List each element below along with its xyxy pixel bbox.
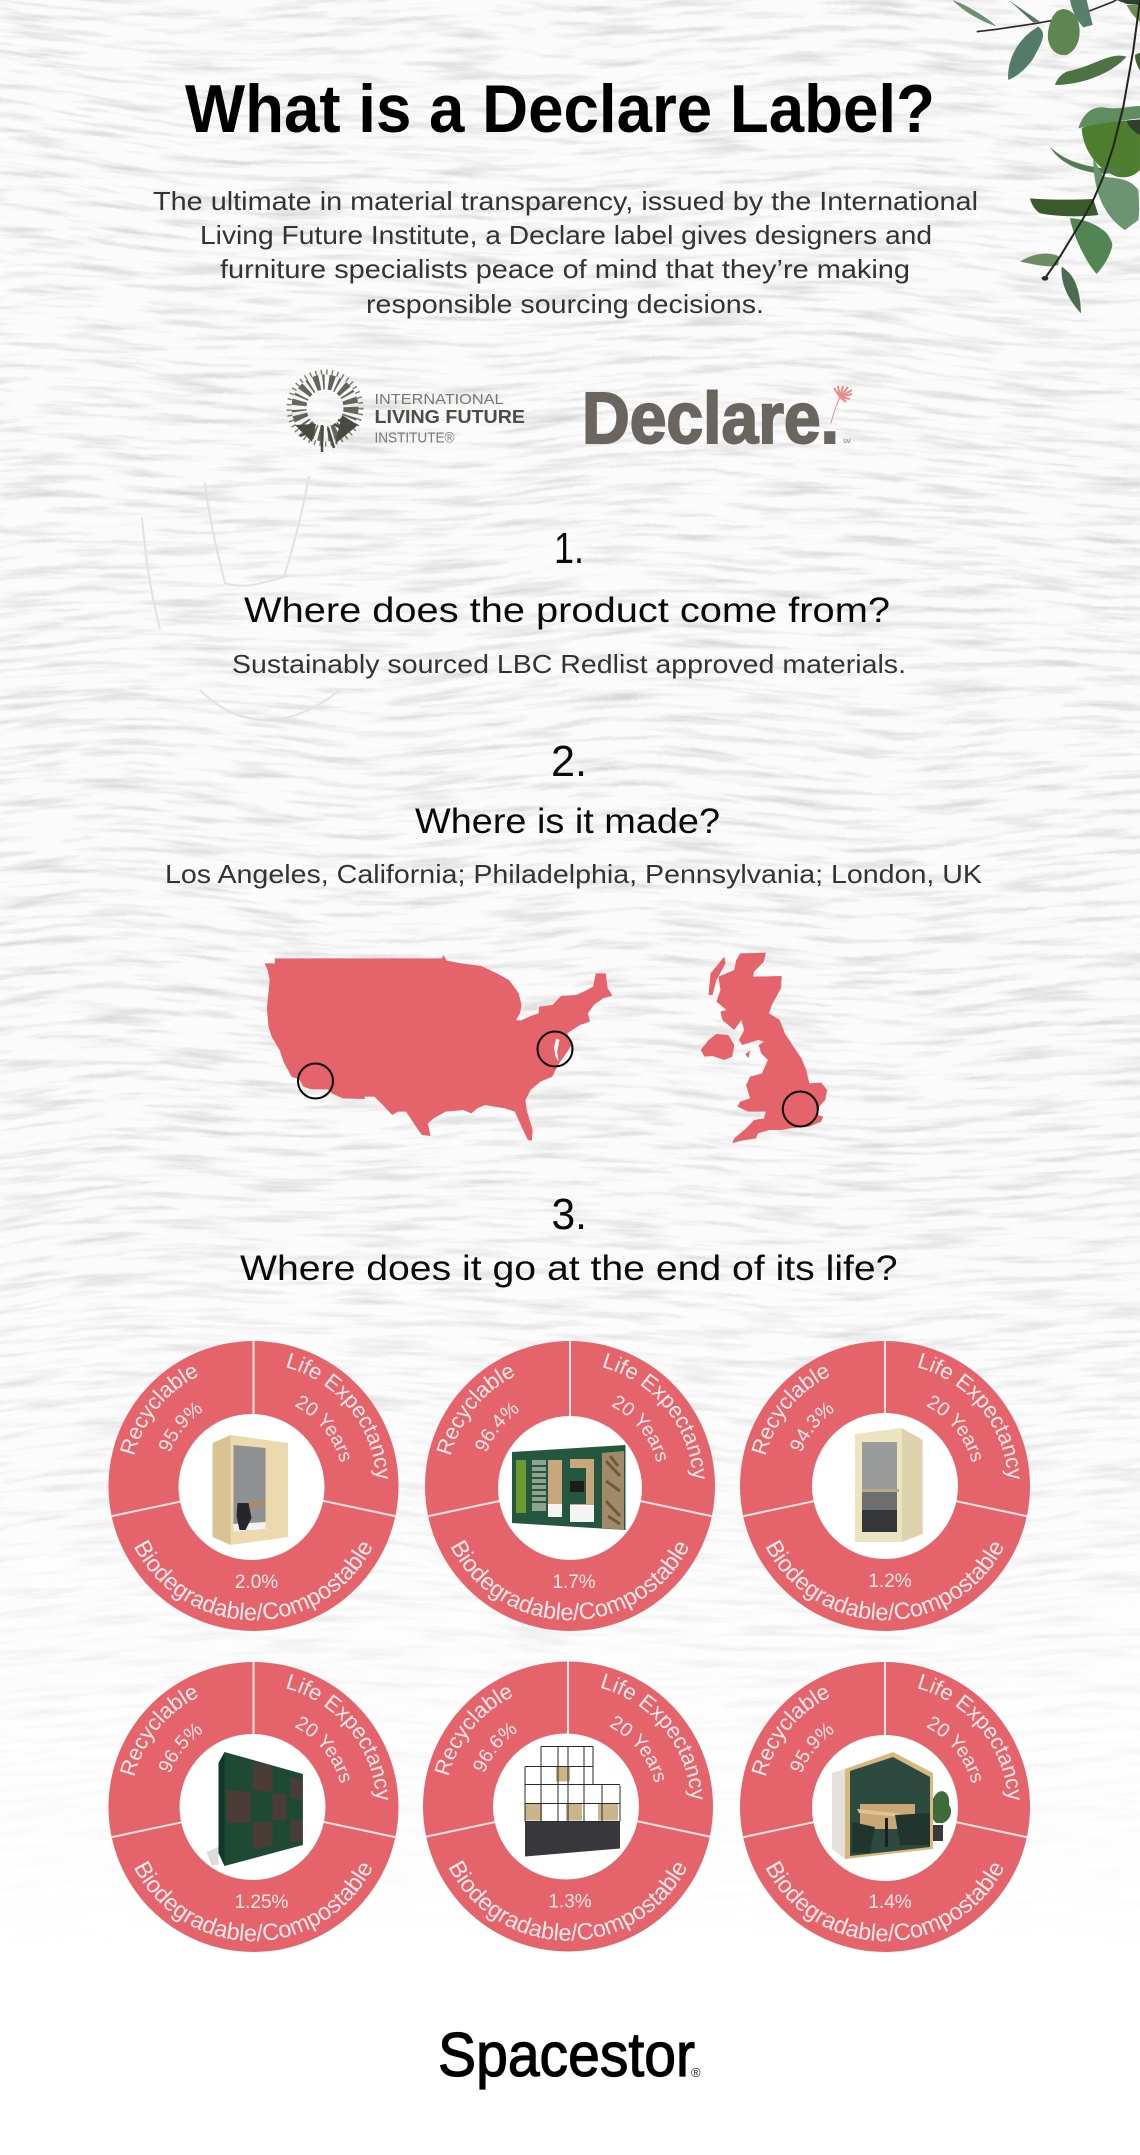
recyclable value: 96.6% xyxy=(474,1722,516,1772)
intro paragraph: responsible sourcing decisions. xyxy=(366,289,764,319)
intro paragraph xyxy=(153,186,978,319)
recyclable label: Recyclable xyxy=(436,1367,514,1455)
product hole xyxy=(812,1413,958,1559)
logo: Spacestor: ® xyxy=(691,2065,701,2080)
marker: Philadelphia xyxy=(538,1032,572,1066)
product hole xyxy=(493,1734,639,1880)
logo: Declare: SM xyxy=(843,439,850,445)
biodegradable label: Biodegradable/Compostable xyxy=(448,1860,686,1941)
product: meeting pod xyxy=(832,1752,951,1859)
biodegradable label: Biodegradable/Compostable xyxy=(766,1540,1003,1620)
life expectancy value: 20 Years xyxy=(926,1716,981,1783)
section 1 xyxy=(232,524,906,679)
map: United States xyxy=(265,955,612,1141)
recyclable value: 96.4% xyxy=(476,1402,518,1451)
logo: Declare: Declare. xyxy=(582,379,839,459)
product: wire shelving xyxy=(525,1746,620,1856)
section 2: Los Angeles, California; Philadelphia, Pennsylvania; London, UK xyxy=(165,859,983,889)
donut: meeting pod 95.9% xyxy=(740,1662,1030,1952)
biodegradable label: Biodegradable/Compostable xyxy=(134,1540,372,1620)
life expectancy value: 20 Years xyxy=(926,1396,981,1462)
marker: Los Angeles xyxy=(298,1064,333,1098)
recyclable label: Recyclable xyxy=(434,1688,512,1776)
recyclable label: Recyclable xyxy=(752,1688,829,1776)
section 2 xyxy=(165,737,983,889)
product: wood booth xyxy=(212,1435,288,1545)
logo: Spacestor: Spacestor xyxy=(438,2021,695,2090)
donut: acoustic booth 95.9% xyxy=(108,1341,398,1631)
biodegradable label: Biodegradable/Compostable xyxy=(450,1540,688,1620)
logo: International Living Future Institute: LIVING FUTURE xyxy=(374,407,525,427)
logo: International Living Future Institute: INSTITUTE® xyxy=(374,430,454,446)
section 2: 2. xyxy=(551,737,587,786)
life expectancy label: Life Expectancy xyxy=(286,1353,388,1479)
recyclable value: 95.9% xyxy=(159,1402,202,1451)
biodegradable value: 1.25% xyxy=(235,1892,289,1913)
section 1: Sustainably sourced LBC Redlist approved materials. xyxy=(232,649,906,679)
donut: green wall 96.4% xyxy=(425,1341,715,1631)
life expectancy label: Life Expectancy xyxy=(918,1353,1020,1479)
recyclable label: Recyclable xyxy=(120,1688,198,1776)
product: green wall system xyxy=(512,1445,626,1530)
product: cream booth xyxy=(855,1428,923,1542)
logo: International Living Future Institute xyxy=(289,372,525,452)
recyclable label: Recyclable xyxy=(752,1367,829,1455)
map: United Kingdom xyxy=(701,953,827,1143)
biodegradable value: 1.2% xyxy=(868,1571,912,1592)
biodegradable label: Biodegradable/Compostable xyxy=(766,1860,1003,1942)
life expectancy value: 20 Years xyxy=(612,1396,666,1462)
section 3: Where does it go at the end of its life? xyxy=(240,1249,897,1288)
recyclable label: Recyclable xyxy=(120,1367,198,1455)
section 1: 1. xyxy=(554,524,584,573)
biodegradable value: 1.3% xyxy=(548,1892,592,1912)
product hole xyxy=(180,1734,326,1880)
product hole xyxy=(498,1416,642,1560)
section 2: Where is it made? xyxy=(415,802,720,841)
icon: dandelion xyxy=(289,372,361,452)
life expectancy label: Life Expectancy xyxy=(601,1674,703,1800)
decoration: eucalyptus branch xyxy=(953,0,1140,313)
recyclable value: 96.5% xyxy=(159,1723,202,1772)
product hole xyxy=(178,1414,324,1560)
donut: shelving 96.6% xyxy=(423,1662,713,1952)
biodegradable label: Biodegradable/Compostable xyxy=(134,1860,372,1942)
life expectancy value: 20 Years xyxy=(610,1716,664,1782)
life expectancy value: 20 Years xyxy=(295,1716,350,1783)
intro paragraph: Living Future Institute, a Declare label gives designers and xyxy=(200,220,932,250)
marker: London xyxy=(783,1092,818,1126)
title: What is a Declare Label? xyxy=(185,71,935,147)
life expectancy label: Life Expectancy xyxy=(918,1674,1020,1800)
donut: cream booth 94.3% xyxy=(740,1341,1030,1631)
biodegradable value: 1.7% xyxy=(552,1572,596,1593)
intro paragraph: The ultimate in material transparency, issued by the International xyxy=(153,186,978,216)
section 3: 3. xyxy=(552,1190,587,1239)
biodegradable value: 1.4% xyxy=(868,1892,912,1913)
product hole xyxy=(812,1735,958,1881)
section 1: Where does the product come from? xyxy=(244,591,890,630)
donut: lockers 96.5% xyxy=(108,1662,398,1952)
recyclable value: 94.3% xyxy=(790,1402,834,1451)
life expectancy label: Life Expectancy xyxy=(286,1674,388,1800)
life expectancy label: Life Expectancy xyxy=(603,1353,705,1479)
product: green and brown lockers xyxy=(206,1752,303,1866)
section 3 xyxy=(240,1190,897,1288)
recyclable value: 95.9% xyxy=(790,1723,834,1772)
icon: dandelion seed xyxy=(831,386,852,423)
logo: International Living Future Institute: INTERNATIONAL xyxy=(374,391,504,408)
life expectancy value: 20 Years xyxy=(295,1396,350,1462)
intro paragraph: furniture specialists peace of mind that they’re making xyxy=(220,254,910,284)
biodegradable value: 2.0% xyxy=(235,1572,278,1593)
